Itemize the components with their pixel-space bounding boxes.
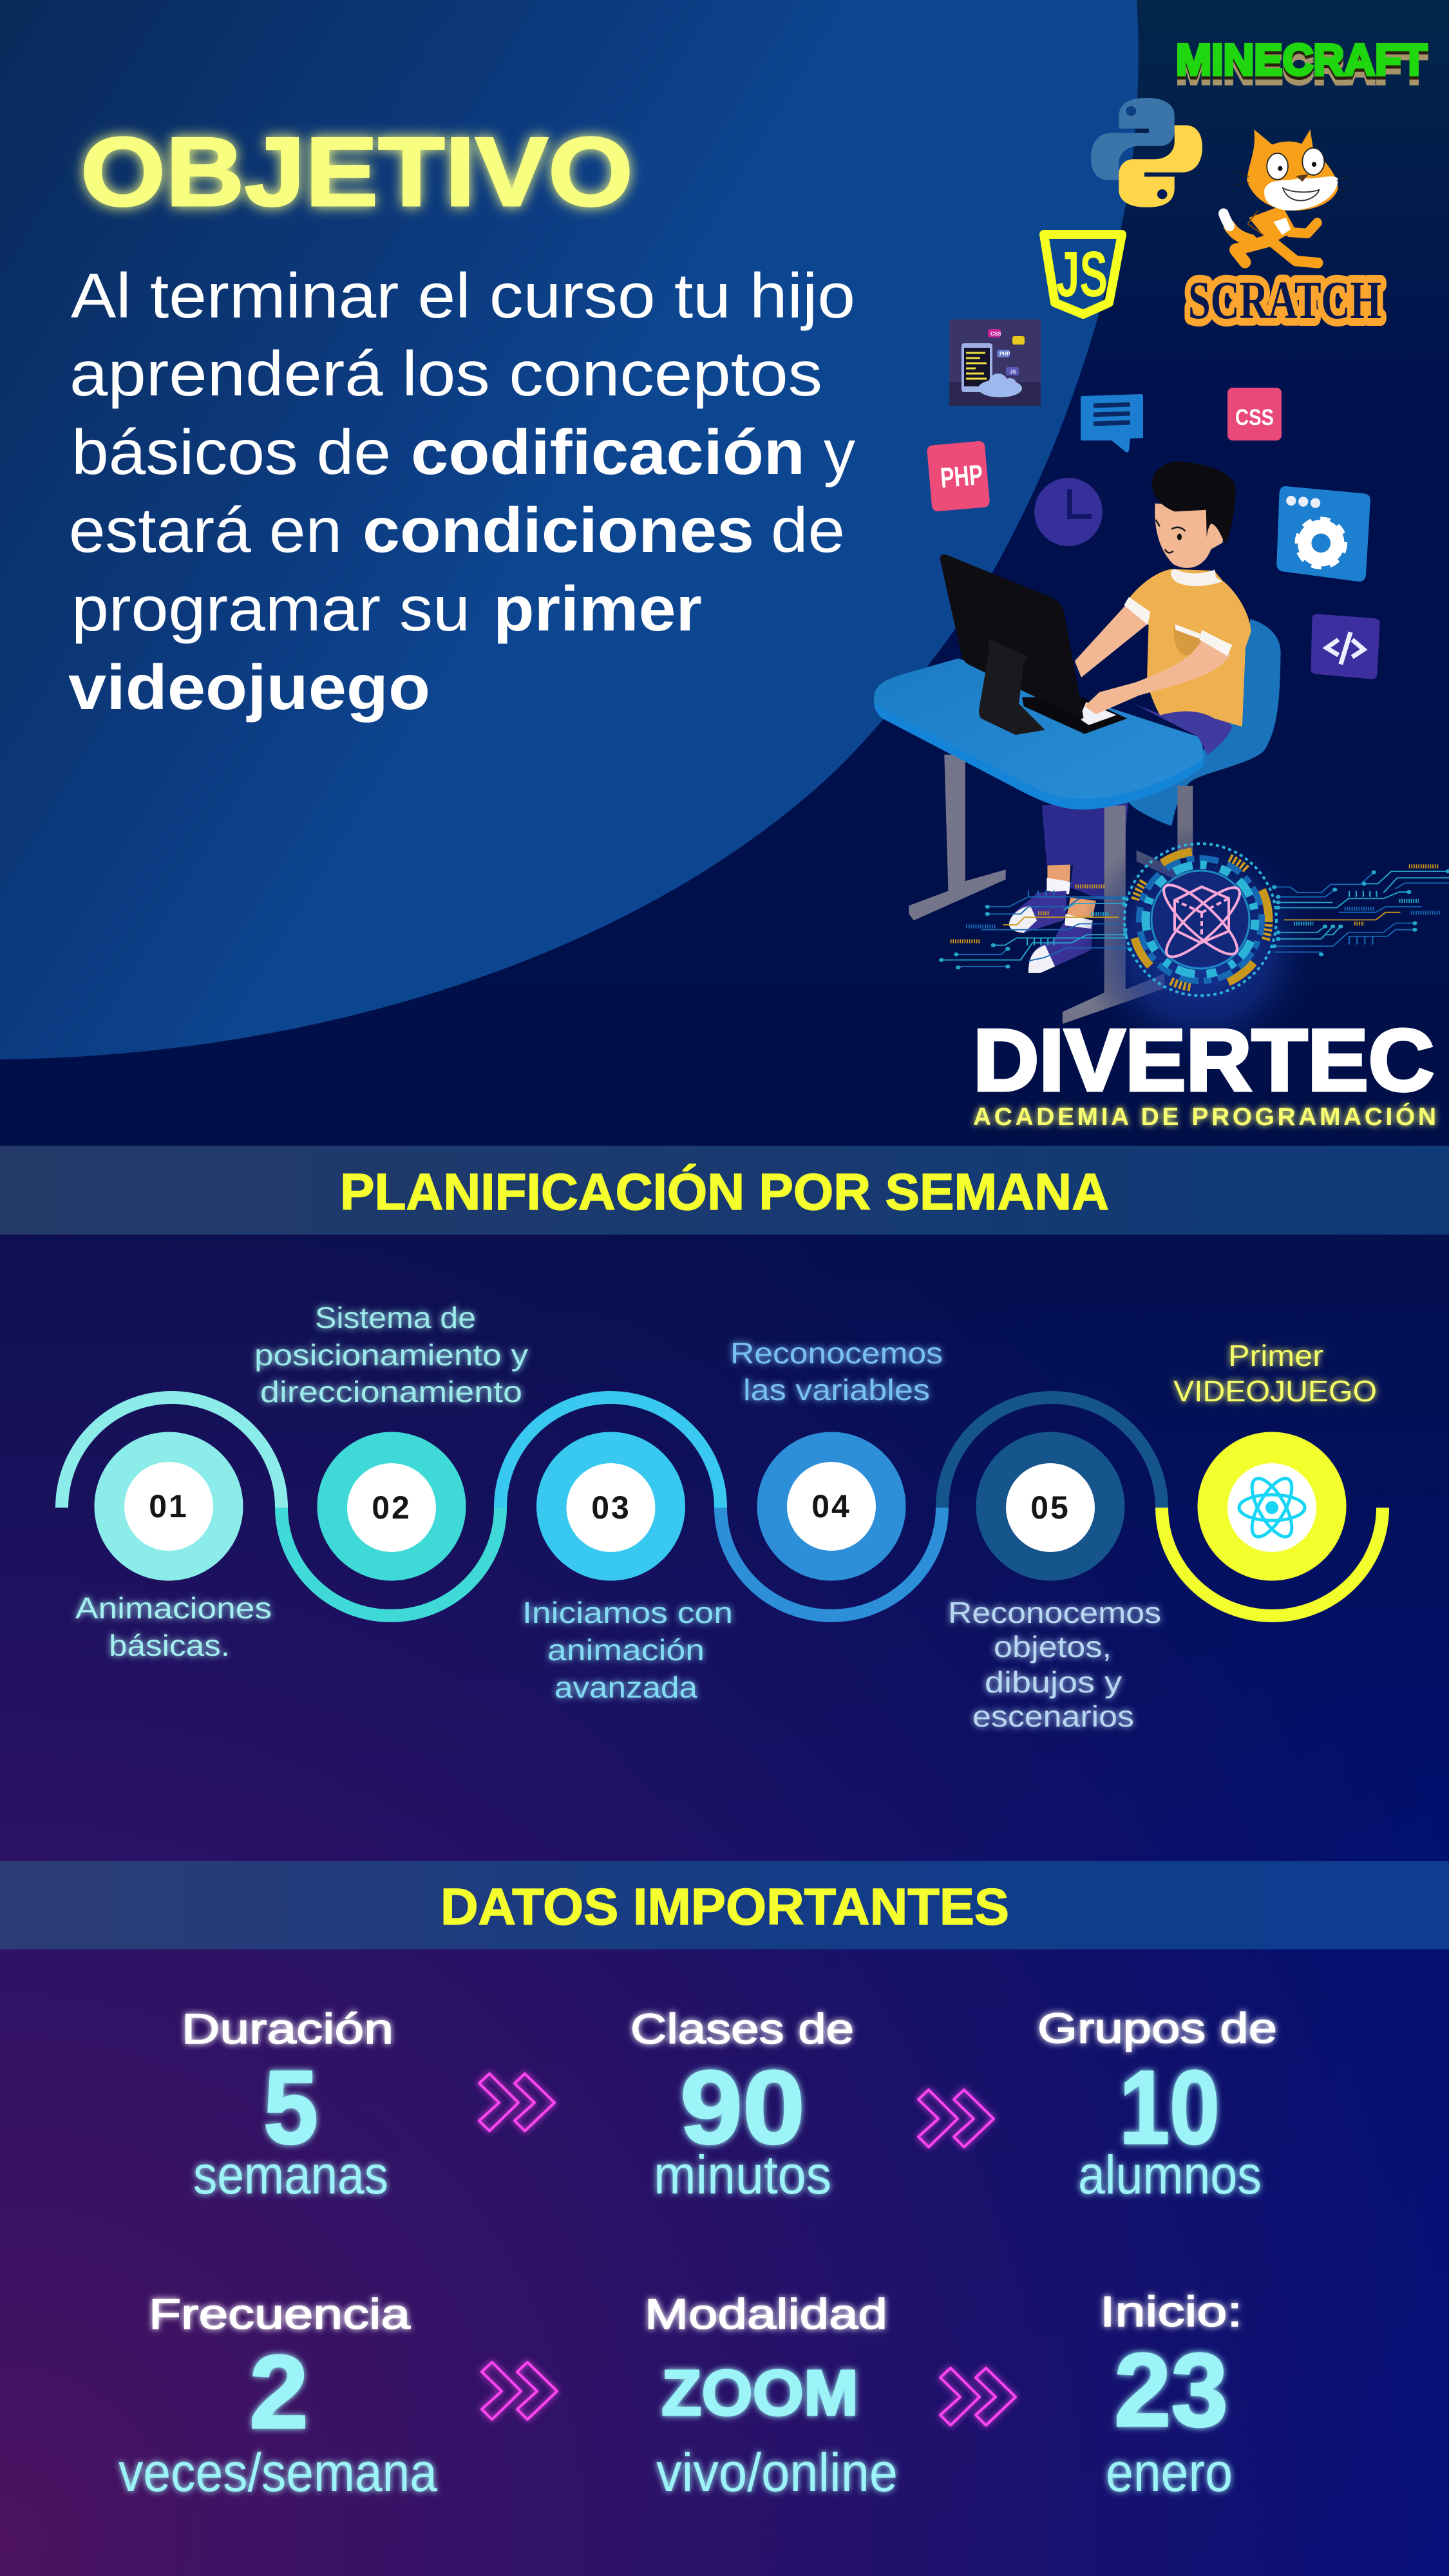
title: OBJETIVO: OBJETIVO [80,117,633,227]
hair [1152,461,1236,544]
label: Reconocemos objetos: Reconocemos [948,1596,1161,1629]
arrow: row 1 second [918,2090,994,2147]
text block: objective paragraph: aprenderá los conceptos [70,338,822,409]
icon: chat bubble [1081,394,1143,452]
arrow: row 2 second [940,2368,1016,2425]
keyboard [1022,697,1127,734]
fact: duracion: Duración [182,2005,393,2052]
fact: inicio: Inicio: [1100,2287,1242,2335]
heading band: planificacion por semana [0,1146,1449,1235]
fact: frecuencia: veces/semana [118,2442,437,2503]
face details [1156,520,1186,553]
label: Reconocemos objetos: dibujos y [985,1665,1122,1699]
large blue curved shape [0,0,1139,1059]
trousers lower legs [1042,799,1129,901]
step 02 [317,1432,466,1580]
heading band: datos importantes [0,1861,1449,1949]
left table leg and foot [909,755,1006,920]
fact: modalidad [645,2290,898,2503]
icon: JavaScript shield: JS [1056,238,1108,310]
step 01: 01 [149,1488,189,1524]
step 05: 05 [1030,1490,1070,1526]
fact: inicio [1100,2287,1242,2503]
sleeve cuff [1124,597,1150,625]
back arm [1075,605,1149,677]
label: Reconocemos las variables [730,1336,943,1406]
step 05 [976,1432,1124,1580]
text block: objective paragraph: videojuego [68,652,430,723]
icon: clock [1034,478,1103,546]
text block: objective paragraph: estará en [69,495,342,565]
label: Reconocemos las variables: Reconocemos [730,1336,943,1370]
emblem: tech circle with cube [1124,844,1276,996]
front arm and hand [1084,638,1231,714]
fact: modalidad: Modalidad [645,2290,887,2338]
icon: PHP badge [927,440,990,512]
arrow: row 1 first [479,2074,554,2131]
text block: objective paragraph: condiciones [363,495,754,565]
icon: CSS badge: CSS [1235,405,1274,430]
icon: PHP badge: PHP [939,459,984,494]
fact: grupos [1037,2004,1277,2205]
text block: objective paragraph: programar su [71,573,470,644]
icon: settings window [1276,486,1370,582]
fact: clases: Clases de [630,2005,854,2052]
step 04 [757,1432,905,1580]
skin and socks [1047,865,1070,881]
fact: duracion: 5 [263,2049,318,2166]
text block: objective paragraph: codificación [411,417,805,488]
head [1155,504,1227,568]
step 04: 04 [811,1488,851,1524]
label: Iniciamos con animacion avanzada [522,1596,733,1704]
label: Iniciamos con animacion avanzada: avanzada [554,1671,697,1704]
icon: code tablet and cloud: CSS [990,331,1001,337]
step 03: 03 [591,1490,631,1526]
fact: clases [630,2005,854,2205]
fact: clases: 90 [680,2049,805,2166]
fact: grupos: 10 [1119,2049,1220,2166]
panel: key facts [118,2004,1277,2503]
label: Sistema de posicionamiento [254,1301,528,1408]
emblem glow [1078,824,1323,1069]
icon: code tablet and cloud: JS [1010,369,1016,375]
text block: objective paragraph [68,260,855,723]
label: Animaciones basicas: básicas. [109,1629,230,1662]
label: Animaciones basicas [75,1591,272,1662]
background: lower sections [0,1146,1449,2576]
icon: CSS badge [1227,388,1282,440]
label: Reconocemos objetos [948,1596,1161,1733]
panel: weekly timeline [62,1301,1383,1733]
fact: grupos: Grupos de [1037,2004,1277,2052]
desk top [874,658,1204,810]
shirt pocket [1174,625,1201,655]
tagline: academia de programacion: ACADEMIA DE PROGRAMACIÓN [973,1103,1436,1131]
icon: code tablet and cloud [949,319,1041,406]
step 02: 02 [372,1490,412,1526]
icon: JavaScript shield [1044,234,1122,314]
label: Iniciamos con animacion avanzada: animación [547,1633,705,1667]
label: Sistema de posicionamiento: direccionamiento [260,1375,522,1408]
icon: code tag badge [1311,614,1380,679]
text block: objective paragraph: primer [493,573,702,644]
shirt [1126,569,1251,726]
text block: objective paragraph: Al terminar el curso tu hijo [71,260,855,331]
icon: code tablet and cloud: PHP [999,351,1010,357]
label: Sistema de posicionamiento: Sistema de [315,1301,476,1334]
collar [1171,569,1222,586]
fact: modalidad: ZOOM [661,2357,858,2429]
fact: modalidad: vivo/online [656,2442,898,2503]
illustration: boy coding at desk [874,461,1380,1024]
circuit lines [939,866,1449,969]
label: Primer videojuego [1173,1339,1377,1408]
monitor stand [979,638,1045,735]
label: Animaciones basicas: Animaciones [75,1591,272,1625]
timeline arcs [62,1397,1383,1616]
icon: Minecraft logo: MINECRAFT [1176,35,1427,84]
monitor [940,554,1084,721]
label: Reconocemos las variables: las variables [743,1373,930,1406]
step 01 [94,1432,243,1580]
icon: Python logo [1091,98,1202,207]
text block: objective paragraph: de [771,495,845,565]
back table leg [1177,786,1193,858]
fact: inicio: 23 [1114,2332,1228,2448]
logo: DIVERTEC: DIVERTEC [973,1011,1434,1109]
label: Reconocemos objetos: escenarios [972,1700,1134,1733]
label: Primer videojuego: VIDEOJUEGO [1173,1374,1377,1408]
fact: frecuencia: 2 [249,2334,308,2450]
text block: objective paragraph: básicos de [71,417,391,488]
label: Primer videojuego: Primer [1228,1339,1323,1372]
label: Reconocemos objetos: objetos, [994,1630,1112,1663]
fact: duracion: semanas [193,2145,388,2205]
shoes [1009,891,1066,933]
arrow: row 2 first [482,2362,557,2420]
icon: Scratch wordmark: SCRATCH [1188,270,1381,330]
fact: clases: minutos [654,2145,831,2205]
fact: grupos: alumnos [1078,2145,1262,2205]
text block: objective paragraph: y [824,417,855,488]
fact: frecuencia [118,2290,437,2503]
heading band: planificacion por semana: PLANIFICACIÓN POR SEMANA [340,1163,1109,1220]
seat and trousers [1134,704,1233,755]
chair [1129,619,1281,826]
final step with React icon [1198,1432,1346,1580]
panel: hero objective [0,0,1449,1146]
step 03 [536,1432,685,1580]
heading band: datos importantes: DATOS IMPORTANTES [440,1878,1009,1935]
fact: frecuencia: Frecuencia [149,2290,410,2338]
label: Sistema de posicionamiento: posicionamiento y [254,1338,528,1372]
icon: Scratch cat [1224,129,1349,263]
fact: duracion [182,2005,393,2205]
fact: inicio: enero [1106,2442,1233,2503]
label: Iniciamos con animacion avanzada: Iniciamos con [522,1596,733,1629]
hero background [0,0,1449,1146]
right table leg and foot [1063,806,1164,1024]
